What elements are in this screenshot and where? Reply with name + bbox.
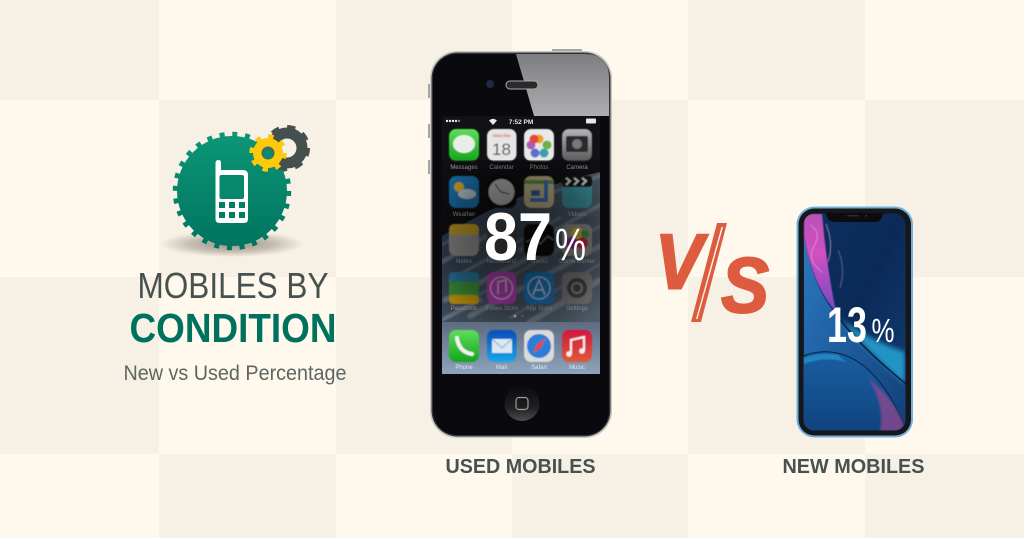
status bar: 7:52 PM	[509, 119, 533, 126]
page dots	[514, 314, 524, 318]
dark curve	[832, 310, 906, 384]
dock labels: Music	[569, 365, 585, 371]
yellow gear	[252, 136, 284, 170]
mid blue area	[804, 236, 906, 431]
87 percent: %	[555, 219, 586, 270]
letter V: V	[655, 218, 709, 306]
app labels: Stocks	[530, 259, 548, 265]
pink swoosh	[804, 214, 836, 312]
app labels	[450, 165, 595, 312]
app icons: Saturday	[492, 133, 511, 138]
app labels: Passbook	[451, 306, 478, 312]
dock labels	[456, 364, 585, 369]
dock	[442, 322, 600, 374]
app labels: Settings	[566, 306, 588, 312]
notch	[826, 213, 883, 222]
side buttons	[428, 49, 582, 174]
dock labels: Phone	[455, 365, 473, 371]
app labels: Calendar	[489, 165, 514, 171]
screen wallpaper	[803, 213, 906, 431]
new phone	[796, 206, 913, 438]
app icons: 18	[492, 140, 511, 159]
wallpaper cloud streaks	[442, 176, 600, 322]
app icons	[449, 129, 592, 304]
app labels: Camera	[566, 165, 588, 171]
status bar	[446, 118, 596, 125]
dark gear	[266, 128, 308, 168]
dock labels: Safari	[531, 365, 547, 371]
slash	[691, 223, 727, 322]
home button	[504, 386, 540, 421]
camera and speaker	[486, 80, 538, 89]
app labels: App Store	[526, 306, 553, 312]
lower wave	[803, 352, 906, 431]
screen	[442, 116, 600, 374]
swirl highlights	[810, 224, 843, 288]
used phone	[428, 49, 612, 438]
mobile phone glyph	[216, 160, 248, 223]
new mobiles label: NEW MOBILES	[782, 456, 924, 478]
badge shadow	[160, 231, 304, 257]
app labels: Newsstand	[487, 259, 516, 265]
app labels: Notes	[456, 259, 472, 265]
icon: phone in gear badge	[160, 128, 308, 257]
13 percent: 13	[827, 297, 867, 353]
letter S: S	[721, 241, 769, 329]
glass glare	[516, 54, 609, 116]
dock icons	[449, 330, 592, 362]
title: mobiles by condition: MOBILES BY	[138, 265, 328, 306]
subtitle: New vs Used Percentage	[124, 362, 346, 385]
dock labels: Mail	[496, 365, 507, 371]
app labels: Videos	[568, 212, 586, 218]
green cog badge	[176, 134, 288, 248]
used mobiles label: USED MOBILES	[446, 456, 596, 478]
dark space area	[442, 116, 600, 236]
app labels: Weather	[453, 212, 475, 218]
87 percent: 87	[484, 199, 552, 275]
13 percent: %	[872, 312, 894, 349]
title: mobiles by condition: CONDITION	[130, 305, 336, 351]
phone body	[430, 51, 612, 438]
title: mobiles by condition	[130, 265, 336, 351]
versus mark	[655, 218, 769, 329]
cyan glow	[838, 316, 905, 384]
app labels: iTunes Store	[485, 306, 519, 312]
app labels: Game Center	[559, 259, 595, 265]
app labels: Messages	[450, 165, 478, 171]
dim overlay behind percentage	[442, 160, 600, 322]
app labels: Photos	[530, 165, 548, 171]
phone frame	[796, 206, 913, 438]
